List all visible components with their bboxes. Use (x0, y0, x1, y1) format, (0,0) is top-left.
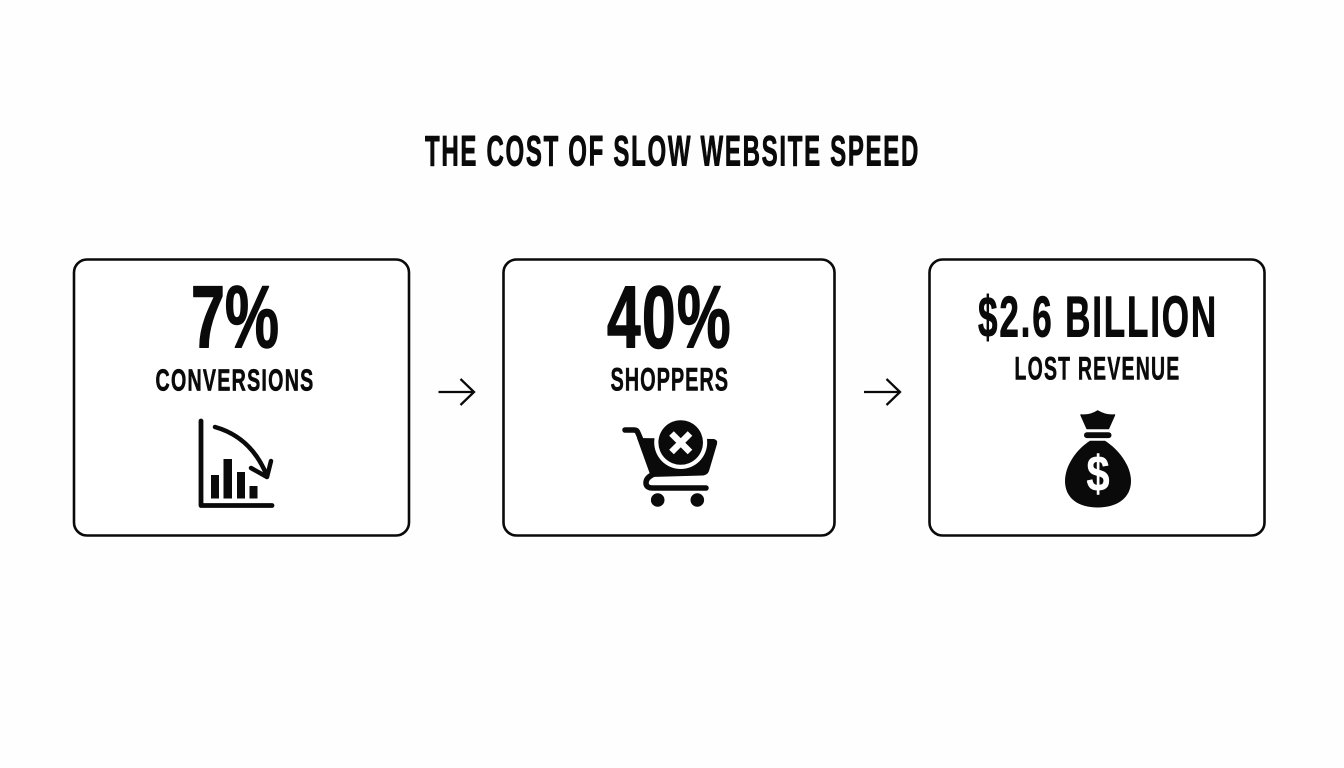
icon: shopping cart with cross (625, 416, 717, 507)
stat: 40%: 40% (607, 268, 732, 366)
icon: money bag: $ (1086, 446, 1110, 502)
panel: shoppers (504, 260, 834, 536)
label: shoppers: SHOPPERS (610, 362, 729, 398)
title: THE COST OF SLOW WEBSITE SPEED (425, 128, 920, 176)
panel: conversions (74, 260, 409, 536)
label: lost revenue: LOST REVENUE (1014, 350, 1180, 386)
panel: lost revenue (930, 260, 1264, 536)
arrow: shoppers to revenue (864, 379, 900, 405)
stat: 7%: 7% (191, 268, 279, 366)
arrow: conversions to shoppers (438, 379, 474, 405)
label: conversions: CONVERSIONS (156, 362, 314, 398)
icon: money bag (1065, 411, 1131, 508)
icon: falling bar chart (201, 421, 272, 506)
